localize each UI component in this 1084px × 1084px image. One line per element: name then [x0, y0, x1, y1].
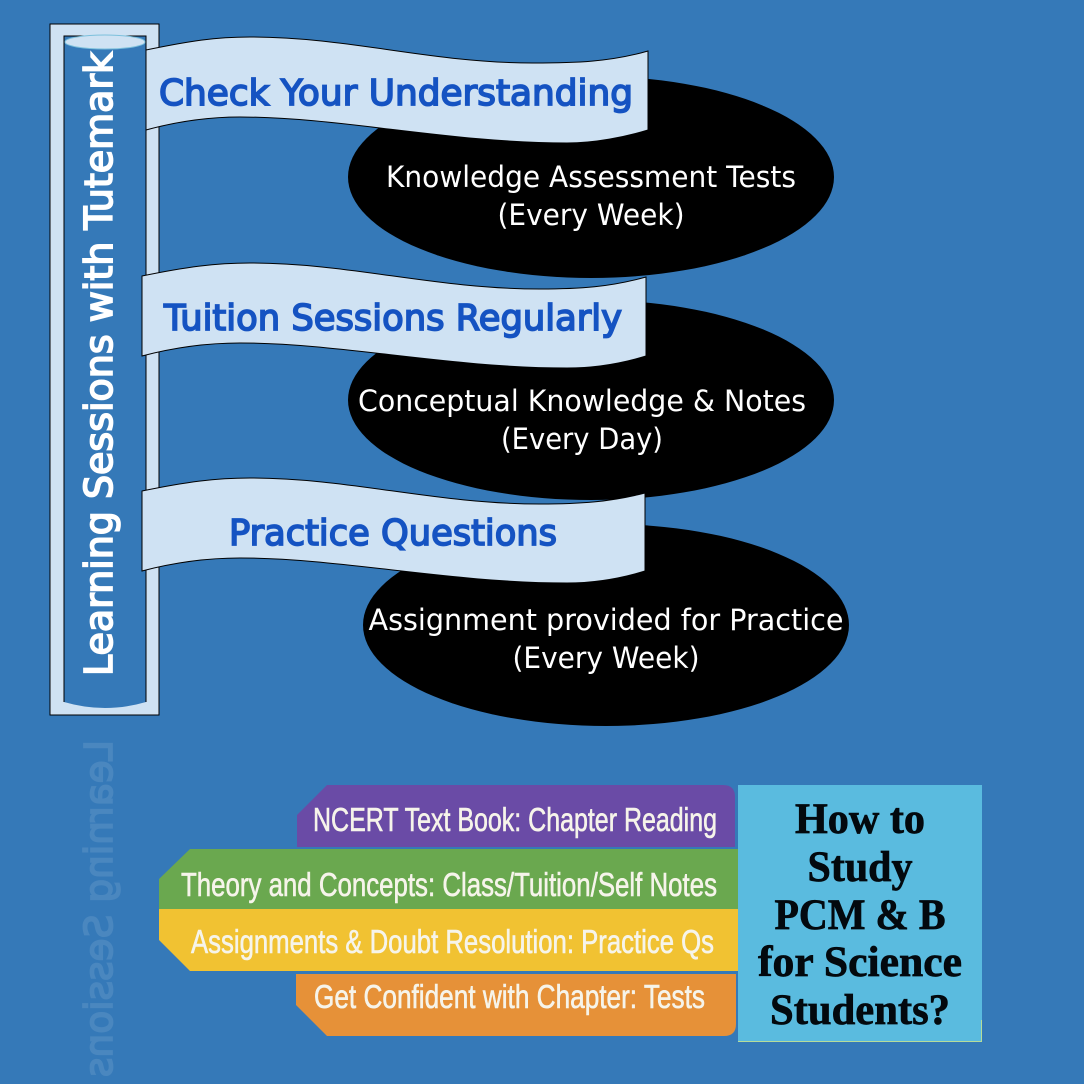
bar: Assignments and Doubt Resolution: Assignments & Doubt Resolution: Practice Qs: [191, 923, 714, 960]
pillar: Learning Sessions with Tutemark: [50, 24, 159, 715]
banner: Check Your Understanding: Check Your Understanding: [159, 73, 633, 114]
title box: How to Study PCM & B for Science Students?: [738, 785, 982, 1042]
banner: Check Your Understanding: [146, 37, 648, 143]
ellipse: conceptual knowledge: (Every Day): [501, 422, 663, 456]
reflection of pillar label: Learning Sessions: [77, 740, 121, 1077]
title box: How to Study PCM & B for Science Students?: How to: [795, 796, 925, 843]
ellipse: knowledge assessment: Knowledge Assessment Tests: [386, 160, 796, 194]
ellipse: assignment practice: [363, 524, 849, 726]
banner: Tuition Sessions Regularly: Tuition Sessions Regularly: [163, 298, 622, 339]
bar: Theory and Concepts: [159, 849, 738, 909]
bar: Get Confident with Chapter: Get Confident with Chapter: Tests: [314, 978, 705, 1015]
title box: How to Study PCM & B for Science Students?: Students?: [770, 987, 950, 1034]
ellipse: conceptual knowledge: [348, 300, 834, 500]
ellipse: conceptual knowledge: Conceptual Knowledge & Notes: [358, 384, 806, 418]
bar: NCERT Text Book: NCERT Text Book: Chapter Reading: [313, 801, 717, 838]
title box: How to Study PCM & B for Science Students?: Study: [808, 844, 913, 891]
title box: How to Study PCM & B for Science Students?: PCM & B: [774, 892, 946, 939]
banner: Tuition Sessions Regularly: [142, 263, 646, 368]
ellipse: assignment practice: (Every Week): [512, 641, 700, 675]
ellipse: knowledge assessment: (Every Week): [498, 198, 684, 232]
title box: How to Study PCM & B for Science Students?: for Science: [758, 939, 962, 986]
bar: Get Confident with Chapter: [296, 974, 736, 1036]
banner: Practice Questions: Practice Questions: [229, 513, 557, 554]
ellipse: assignment practice: Assignment provided for Practice: [368, 603, 844, 637]
bar: NCERT Text Book: [297, 785, 735, 847]
pillar label: Learning Sessions with Tutemark: [77, 52, 121, 676]
bar: Theory and Concepts: Theory and Concepts: Class/Tuition/Self Notes: [181, 866, 717, 903]
ellipse: knowledge assessment: [348, 76, 834, 278]
banner: Practice Questions: [142, 478, 645, 583]
bar: Assignments and Doubt Resolution: [159, 909, 738, 971]
